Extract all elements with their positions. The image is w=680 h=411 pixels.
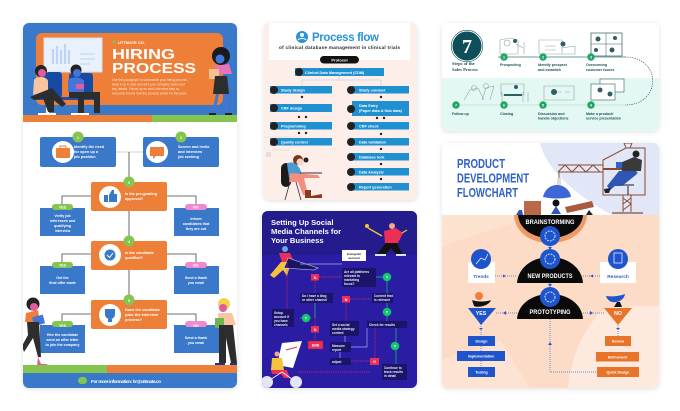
flow box labels: in detail — [384, 374, 396, 378]
step 4 box: Is the candidate — [125, 251, 154, 255]
step 3 no: NO — [193, 206, 199, 210]
research card — [600, 249, 636, 283]
step 4 yes — [40, 262, 85, 294]
right column steps: Study conduct — [359, 88, 386, 92]
panel: process flow — [264, 23, 417, 200]
no steps: Review — [612, 340, 624, 344]
intro text: key details. Follow up on each interview step so — [112, 87, 180, 91]
title: Media Channels for — [271, 227, 341, 236]
left column steps — [270, 86, 332, 146]
icon: seated people — [30, 64, 100, 115]
dashed connectors — [479, 274, 620, 372]
step 3 box — [91, 176, 167, 211]
step 3 yes: qualifying — [54, 224, 71, 228]
step 5 no: NO — [193, 324, 199, 328]
clinical data bar: Clinical Data Management (CDM) — [305, 71, 365, 75]
right column steps: (Paper data & Sub data) — [359, 109, 403, 113]
red decision nodes: N — [314, 328, 317, 332]
timeline nodes: 7 — [455, 104, 457, 108]
step 3 box: Is the pre-grading — [125, 192, 158, 196]
flow box labels: report — [332, 348, 342, 352]
step 3 no — [174, 204, 219, 236]
step 4 box: 4 — [128, 240, 130, 244]
green decision nodes: Y — [386, 310, 389, 314]
green decision nodes: Y — [394, 344, 397, 348]
flow box labels: Measure — [332, 344, 345, 348]
title: PROCESS — [112, 61, 196, 77]
step 5 no: you email — [188, 341, 204, 345]
flow box labels: Setup — [274, 311, 283, 315]
white note box: Instagram — [347, 252, 361, 256]
crane — [558, 143, 645, 213]
brainstorming bowl: BRAINSTORMING — [526, 219, 575, 226]
right column steps — [347, 86, 409, 191]
icon: sketches upper row — [500, 33, 622, 56]
footer band — [23, 365, 237, 388]
step 3 box: 3 — [128, 181, 130, 185]
step 4 box — [91, 236, 167, 270]
no decision: NO — [614, 311, 622, 317]
title: HIRING — [112, 47, 175, 63]
right column steps: CRF check — [359, 124, 380, 128]
flow box labels: is relevant — [374, 298, 391, 302]
step labels: service presentation — [586, 116, 621, 120]
footer band: For more information: hr@uttmate.co — [91, 379, 161, 384]
timeline — [456, 57, 653, 105]
step 3 yes: references and — [50, 219, 75, 223]
flow box labels: account if — [274, 315, 290, 319]
step 4 no: you email — [188, 281, 204, 285]
white note box: account — [348, 256, 360, 260]
step 2 box: job seeking — [177, 155, 200, 159]
step labels: Prospecting — [500, 63, 521, 67]
right column steps: Database lock — [359, 156, 385, 160]
intro text — [112, 78, 188, 96]
step 1 box: 1 — [77, 136, 79, 140]
timeline nodes: 2 — [542, 56, 544, 60]
right column steps: Data validation — [359, 140, 387, 144]
red decision nodes — [308, 274, 379, 365]
yes decision — [468, 292, 496, 325]
icon: person top right — [365, 223, 407, 256]
flow box labels: or other channel — [302, 298, 327, 302]
no decision — [604, 294, 632, 325]
icon: person in crane — [604, 150, 642, 195]
step 1 box — [40, 132, 116, 167]
presentation board — [44, 38, 102, 72]
left column steps: Quality control — [281, 140, 308, 144]
step 3 yes: YES — [59, 206, 67, 210]
flow box labels: relevant to — [344, 274, 360, 278]
red decision nodes: N — [314, 276, 317, 280]
icon: blocks — [516, 200, 594, 215]
number badge: 7 — [462, 36, 472, 58]
step 3 box: approval? — [125, 197, 144, 201]
icon: process flow logo — [296, 31, 308, 43]
step 2 box: 2 — [180, 136, 182, 140]
flow box labels: Continue to — [384, 366, 402, 370]
step labels: Discussion and — [538, 112, 565, 116]
heading — [452, 61, 478, 72]
eyebrow — [112, 40, 145, 44]
flow box labels: media strategy — [332, 327, 355, 331]
step 3 no: Inform — [190, 217, 202, 221]
left column steps: CRF design — [281, 106, 303, 110]
protocol pill — [320, 56, 359, 64]
timeline nodes: 6 — [503, 104, 505, 108]
step 3 yes: interview — [55, 229, 70, 233]
step 4 yes: YES — [59, 264, 67, 268]
intro text: Use this paragraph to summarize your hiring process, — [112, 78, 188, 82]
yes steps: Implementation — [468, 354, 494, 358]
number badge — [451, 30, 483, 62]
research card: Research — [607, 274, 629, 280]
title — [271, 220, 341, 243]
step 3 yes: Verify job — [54, 214, 71, 218]
panel: social media flowchart — [261, 211, 417, 388]
trends card: Trends — [473, 274, 489, 280]
flow box labels: content — [332, 331, 344, 335]
step 4 no — [174, 262, 219, 294]
flow box labels — [274, 270, 403, 378]
panel: hiring process — [22, 23, 238, 388]
new products dome — [517, 249, 583, 283]
title — [457, 156, 529, 200]
no steps: Quick Design — [607, 370, 629, 374]
step labels: and establish — [538, 68, 561, 72]
step labels: Make a product/ — [586, 112, 613, 116]
red decision nodes: END — [312, 344, 320, 348]
step 5 yes: send an offer letter — [46, 338, 79, 342]
yes steps: Testing — [475, 370, 488, 374]
step 1 box: Identify the need — [74, 145, 105, 149]
clinical data bar — [295, 68, 384, 76]
timeline nodes: 3 — [590, 56, 592, 60]
step 2 box — [143, 132, 219, 167]
step 4 yes: final offer made — [49, 281, 76, 285]
step 5 yes — [40, 321, 85, 353]
step 5 yes: Hire the candidate — [47, 333, 78, 337]
yes steps — [457, 336, 505, 377]
flow box labels: focus? — [344, 282, 355, 286]
no steps — [596, 336, 639, 377]
step 5 no: Send a thank — [185, 336, 207, 340]
flow box labels: marketing — [344, 278, 359, 282]
panel: product development flowchart — [442, 143, 659, 388]
step labels: handle objections — [538, 116, 569, 120]
yes decision: YES — [476, 311, 487, 317]
flow box labels: Do I have a blog — [302, 294, 326, 298]
step 4 box: qualified? — [125, 256, 144, 260]
panel: 7 steps sales process — [442, 23, 659, 131]
step 5 no — [174, 321, 219, 353]
title: PRODUCT — [457, 156, 505, 171]
green decision nodes: Y — [305, 316, 308, 320]
header band — [23, 23, 237, 122]
trends card — [468, 249, 495, 283]
title — [113, 49, 196, 73]
background shapes — [442, 143, 659, 388]
timeline nodes: 4 — [590, 104, 592, 108]
step 5 box — [91, 294, 167, 329]
flow box labels: Set a social — [332, 323, 350, 327]
step labels: Identify prospect — [538, 63, 568, 67]
heading: Sales Process — [452, 67, 478, 72]
step labels: Closing — [500, 112, 513, 116]
title: Process flow — [312, 32, 379, 44]
flow box labels: Are all platforms — [344, 270, 369, 274]
icon: person with chart on bicycle — [261, 341, 302, 388]
step 1 box: for open up a — [74, 150, 99, 154]
prototyping dome — [517, 287, 583, 319]
prototyping dome: PROTOTYPING — [530, 309, 571, 316]
flow box labels: track results — [384, 370, 403, 374]
flow arrows — [287, 258, 396, 372]
flow box labels: Check for results — [369, 323, 395, 327]
right column steps: Data Analysis — [359, 170, 384, 174]
green decision nodes: Y — [386, 276, 389, 280]
timeline nodes: 5 — [542, 104, 544, 108]
red decision nodes: N — [373, 360, 376, 364]
icon: sketches lower row — [464, 79, 624, 102]
yes steps: Design — [476, 340, 487, 344]
title: FLOWCHART — [457, 185, 518, 200]
step labels: customer issues — [586, 68, 614, 72]
red decision nodes: N — [345, 298, 348, 302]
step 4 no: NO — [193, 264, 199, 268]
left column steps: Programming — [281, 124, 306, 128]
step 2 box: Screen and invite — [178, 145, 209, 149]
flow box labels: Content that — [374, 294, 394, 298]
intro text: everyone knows how the process works for the team. — [112, 92, 187, 96]
icon: person with tablet — [270, 246, 318, 278]
white note box — [342, 250, 366, 261]
step 5 yes: YES — [59, 324, 67, 328]
step 4 no: Send a thank — [185, 276, 207, 280]
green decision nodes — [302, 273, 399, 350]
title: DEVELOPMENT — [457, 170, 529, 186]
icon: lamp — [543, 178, 571, 198]
flow box labels: adjust — [332, 360, 342, 364]
connector lines — [62, 152, 196, 325]
timeline nodes — [452, 53, 595, 109]
right column steps: Report generation — [359, 186, 392, 190]
step 3 no: they are out — [186, 227, 207, 231]
step labels: Overcoming — [586, 63, 607, 67]
flow connectors — [302, 76, 381, 86]
flow box labels: channels — [274, 323, 288, 327]
icon: seated person — [264, 137, 322, 200]
brainstorming bowl — [514, 215, 587, 250]
step labels — [452, 63, 621, 120]
heading: Steps of the — [452, 61, 475, 66]
step 3 no: candidates that — [183, 222, 210, 226]
timeline nodes: 1 — [503, 56, 505, 60]
icon: standing woman — [209, 47, 232, 115]
step 5 box: process? — [125, 318, 143, 322]
arrow dots — [298, 96, 385, 180]
step 2 box: and interview — [178, 150, 202, 154]
title: Your Business — [271, 236, 324, 245]
subtitle: of clinical database management in clinical trials — [279, 45, 400, 50]
flow box labels: you have — [274, 319, 288, 323]
flow boxes — [272, 268, 407, 380]
eyebrow: UTTMATE CO. — [118, 40, 145, 45]
step 5 yes: to join the company — [46, 343, 79, 347]
icon: standing man — [215, 298, 238, 365]
step 5 box: pass the interview — [125, 313, 158, 317]
title: Setting Up Social — [271, 218, 333, 227]
step 4 yes: Get the — [56, 276, 69, 280]
step 3 yes — [40, 204, 85, 236]
left column steps: Study design — [281, 88, 306, 92]
step 5 box: 5 — [128, 299, 130, 303]
step labels: Follow up — [452, 112, 470, 116]
protocol pill: Protocol — [331, 58, 348, 62]
right column steps: Data Entry — [359, 104, 379, 108]
intro text: keep it up to date and add your company notes and — [112, 82, 185, 86]
no steps: Refinement — [608, 356, 628, 360]
new products dome: NEW PRODUCTS — [528, 273, 572, 280]
step 5 box: Does the candidate — [125, 308, 160, 312]
icon: walking woman — [22, 298, 49, 366]
step 1 box: job position — [73, 155, 96, 159]
